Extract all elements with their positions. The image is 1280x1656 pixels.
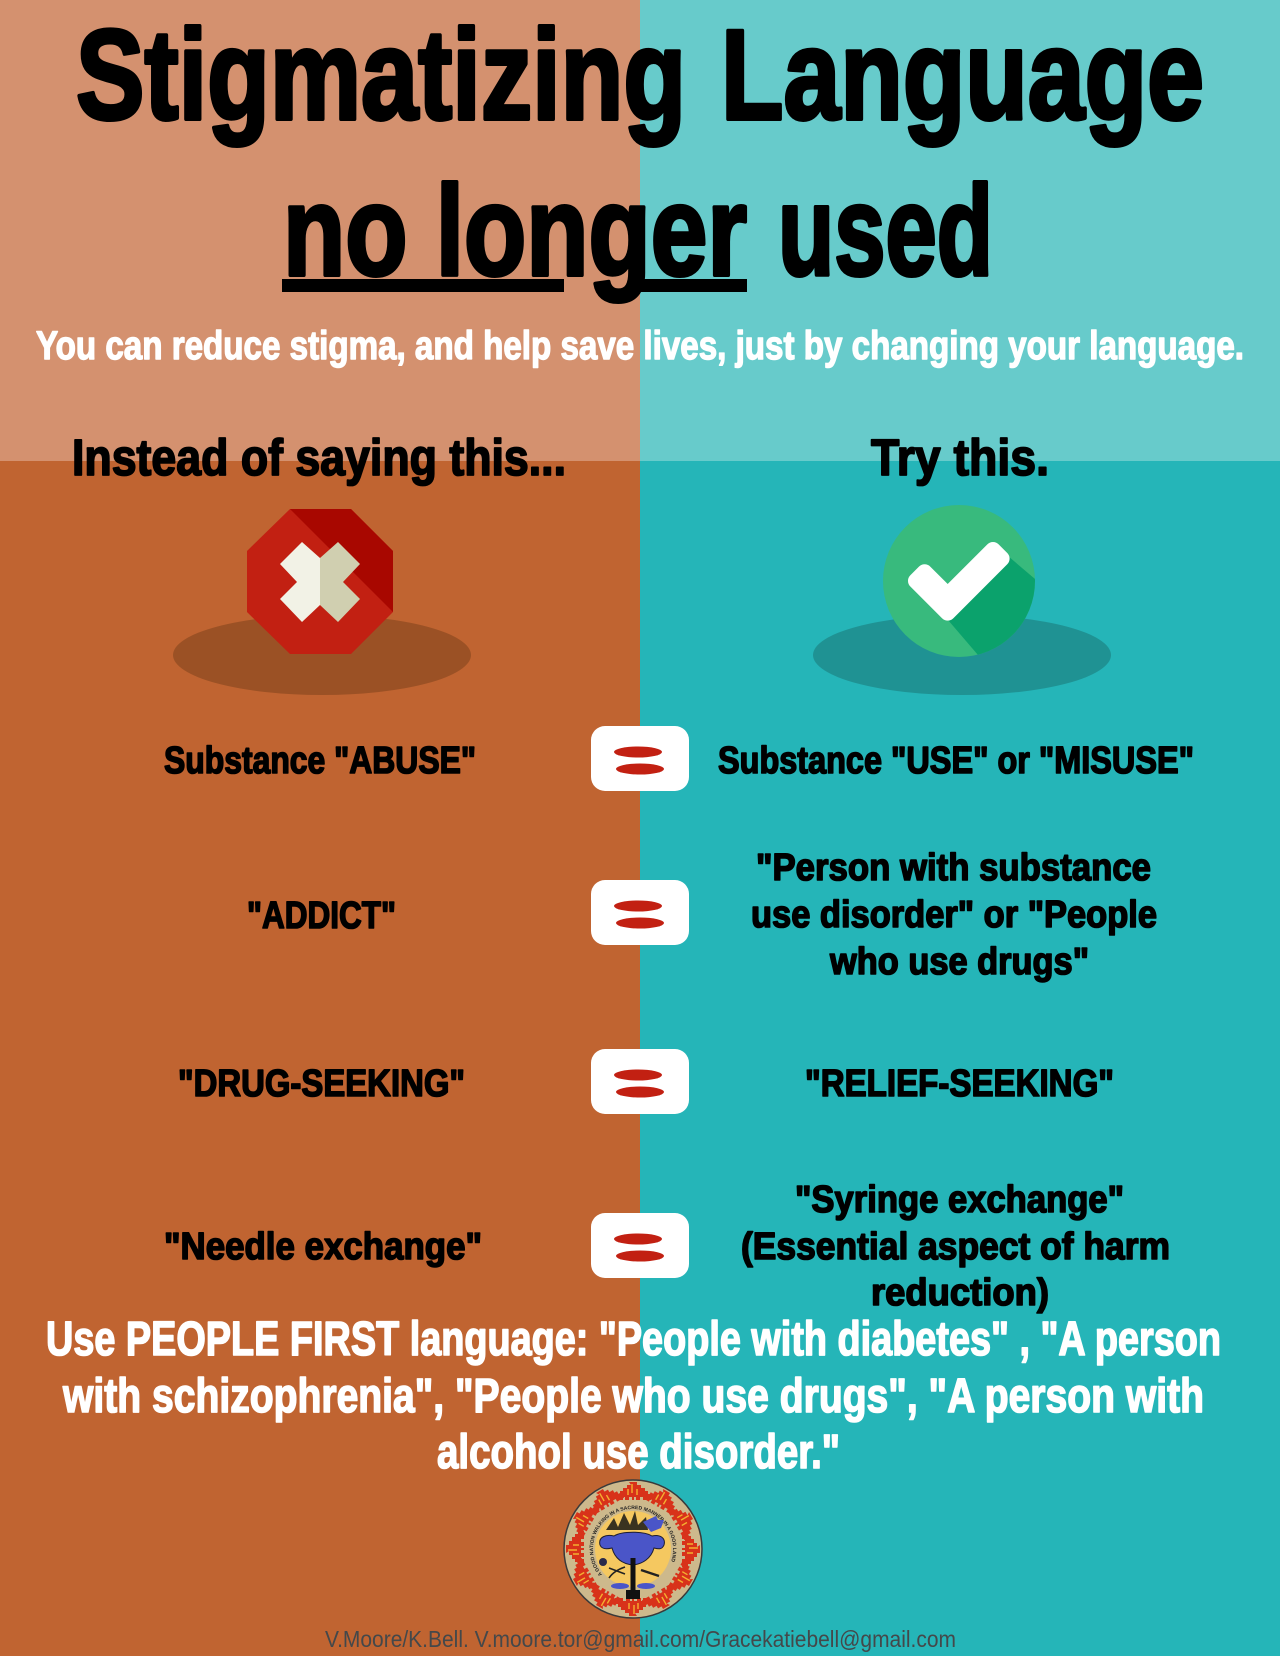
header band: right	[640, 0, 1280, 461]
background: right column	[640, 0, 1280, 1656]
row 4 left: "Needle exchange"	[164, 1226, 482, 1268]
background: left column	[0, 0, 640, 1656]
equals sign 4	[591, 1213, 689, 1278]
row 2 right: use disorder" or "People	[751, 894, 1157, 936]
column heading: try this: Try this.	[871, 429, 1049, 486]
row 4 right: "Syringe exchange"	[795, 1179, 1124, 1221]
equals sign 1	[591, 726, 689, 791]
icon: red stop X	[173, 509, 471, 695]
equals sign 3	[591, 1049, 689, 1114]
row 2 right: "Person with substance	[756, 847, 1151, 889]
row 4 right: (Essential aspect of harm	[741, 1226, 1170, 1268]
people first callout: alcohol use disorder."	[437, 1426, 840, 1479]
row 4 right	[741, 1179, 1170, 1314]
title: Stigmatizing	[76, 4, 686, 147]
title	[76, 4, 1204, 303]
row 1 left: Substance "ABUSE"	[164, 740, 476, 782]
footer credits: V.Moore/K.Bell. V.moore.tor@gmail.com/Gracekatiebell@gmail.com	[325, 1626, 956, 1652]
row 3 left: "DRUG-SEEKING"	[178, 1063, 465, 1105]
row 4 right: reduction)	[871, 1272, 1049, 1314]
row 2 left: "ADDICT"	[247, 895, 396, 937]
row 2 right: who use drugs"	[829, 941, 1089, 983]
icon: green check	[813, 505, 1111, 695]
row 1 right: Substance "USE" or "MISUSE"	[718, 740, 1194, 782]
equals sign 2	[591, 880, 689, 945]
title: no longer	[283, 160, 747, 303]
people first callout	[46, 1313, 1221, 1479]
header band: left	[0, 0, 640, 461]
row 3 right: "RELIEF-SEEKING"	[805, 1063, 1114, 1105]
row 2 right	[751, 847, 1157, 983]
title: used	[778, 160, 993, 303]
column heading: instead of saying this: Instead of saying this...	[72, 429, 566, 486]
logo seal: A GOOD NATION WALKING IN A SACRED MANNER IN A GOOD LAND	[590, 1506, 676, 1576]
logo seal	[563, 1479, 703, 1619]
